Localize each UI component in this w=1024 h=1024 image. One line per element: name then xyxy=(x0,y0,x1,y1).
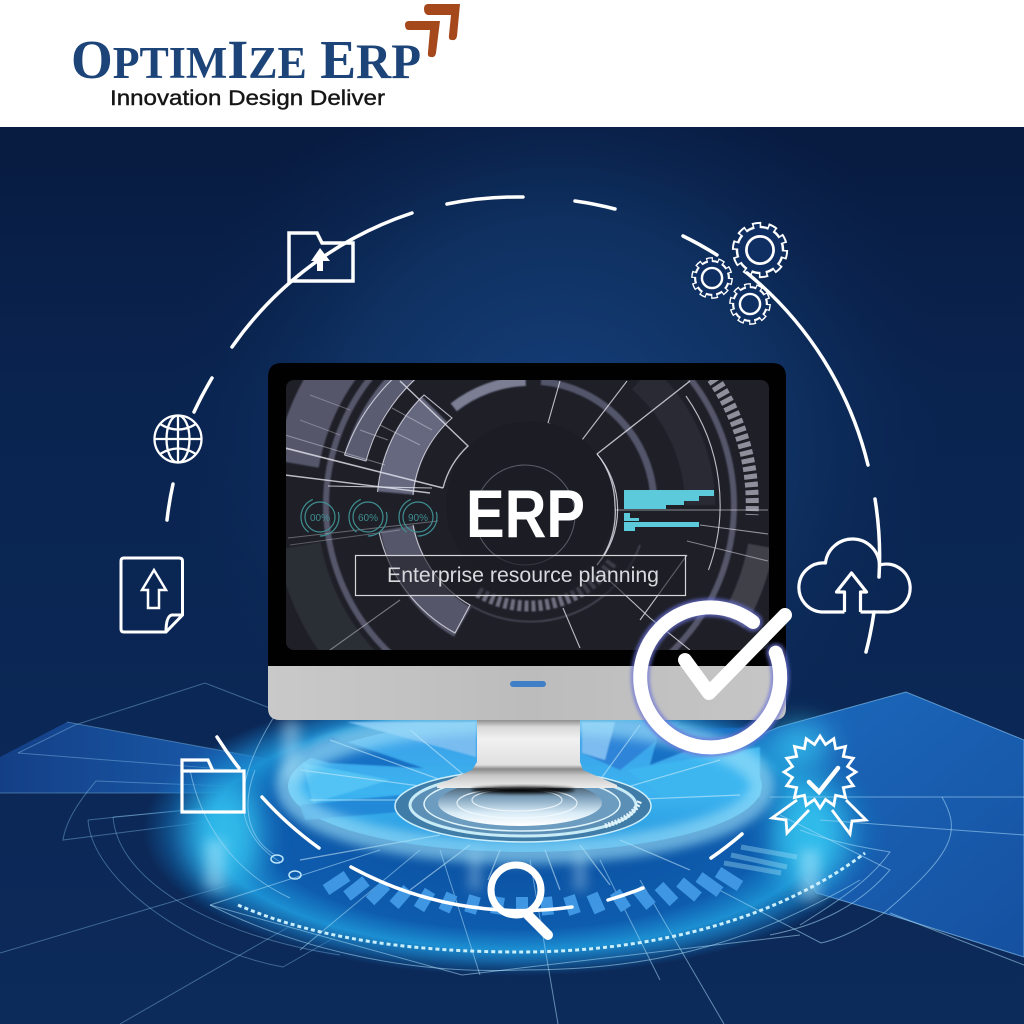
check ring xyxy=(640,607,780,747)
header band xyxy=(0,0,1024,127)
light columns xyxy=(205,720,820,900)
power indicator xyxy=(510,681,546,687)
dais outer ring xyxy=(395,770,651,842)
icon: magnifier xyxy=(491,865,548,935)
dial 1: 00% xyxy=(310,513,330,524)
icon: award badge xyxy=(772,736,866,834)
icon: cloud upload xyxy=(799,539,910,612)
dais tick band xyxy=(605,800,640,826)
node markers xyxy=(271,855,301,879)
center dial inner circle xyxy=(475,465,575,565)
subtitle box: Enterprise resource planning xyxy=(387,564,659,587)
faded bars xyxy=(724,847,797,873)
orbit arc over gears xyxy=(747,273,868,465)
dais inner rings xyxy=(457,788,577,818)
dial 2: 60% xyxy=(358,513,378,524)
logo arrows xyxy=(405,4,460,57)
screen background xyxy=(286,380,769,650)
mini bar chart xyxy=(624,490,714,531)
dais well xyxy=(438,788,602,826)
side glow blobs xyxy=(194,725,844,885)
lower small gear xyxy=(732,286,768,322)
big check mark xyxy=(640,607,785,747)
icon: upload document xyxy=(121,558,182,632)
floor panel left xyxy=(0,722,260,793)
dial 3: 90% xyxy=(408,513,428,524)
screen xyxy=(286,380,769,650)
bar ring xyxy=(326,872,740,915)
progress dials xyxy=(301,498,437,536)
halo interior xyxy=(288,720,762,852)
monitor bezel xyxy=(268,363,786,670)
logo tagline: Innovation Design Deliver xyxy=(110,87,385,110)
logo wordmark: OPTIMIZE ERP xyxy=(71,29,421,90)
holographic floor xyxy=(0,683,1024,1024)
monitor stand xyxy=(437,720,617,788)
stand shadow xyxy=(471,786,575,794)
dotted ring xyxy=(238,853,865,952)
dais mid ring xyxy=(423,788,621,832)
icon: gears xyxy=(694,226,784,322)
center dial xyxy=(547,422,614,498)
logo xyxy=(71,4,460,110)
check glow xyxy=(640,607,780,747)
center dial right edge xyxy=(597,454,618,565)
floor outlines left xyxy=(0,682,340,1024)
icon: globe xyxy=(154,416,202,462)
orbit arcs xyxy=(167,197,880,911)
icon: folder xyxy=(182,760,244,812)
dais pale ring xyxy=(410,774,636,836)
monitor xyxy=(268,363,786,796)
central dais xyxy=(395,770,651,842)
hud bands xyxy=(286,380,769,650)
check tick xyxy=(685,615,785,693)
hud lines xyxy=(285,368,768,650)
outer glow ring xyxy=(148,720,869,974)
monitor chin xyxy=(268,666,786,720)
icon: upload folder xyxy=(289,233,353,281)
halo wedges xyxy=(300,722,760,820)
tick ring xyxy=(713,378,752,515)
pale halo ring xyxy=(288,720,762,852)
floor panel right xyxy=(750,692,1024,958)
left small gear xyxy=(694,260,730,296)
floor outlines right xyxy=(190,700,1024,1024)
big gear xyxy=(736,226,784,274)
radial beams xyxy=(300,725,740,890)
ERP title: ERP xyxy=(466,476,585,552)
subtitle box xyxy=(356,556,686,596)
